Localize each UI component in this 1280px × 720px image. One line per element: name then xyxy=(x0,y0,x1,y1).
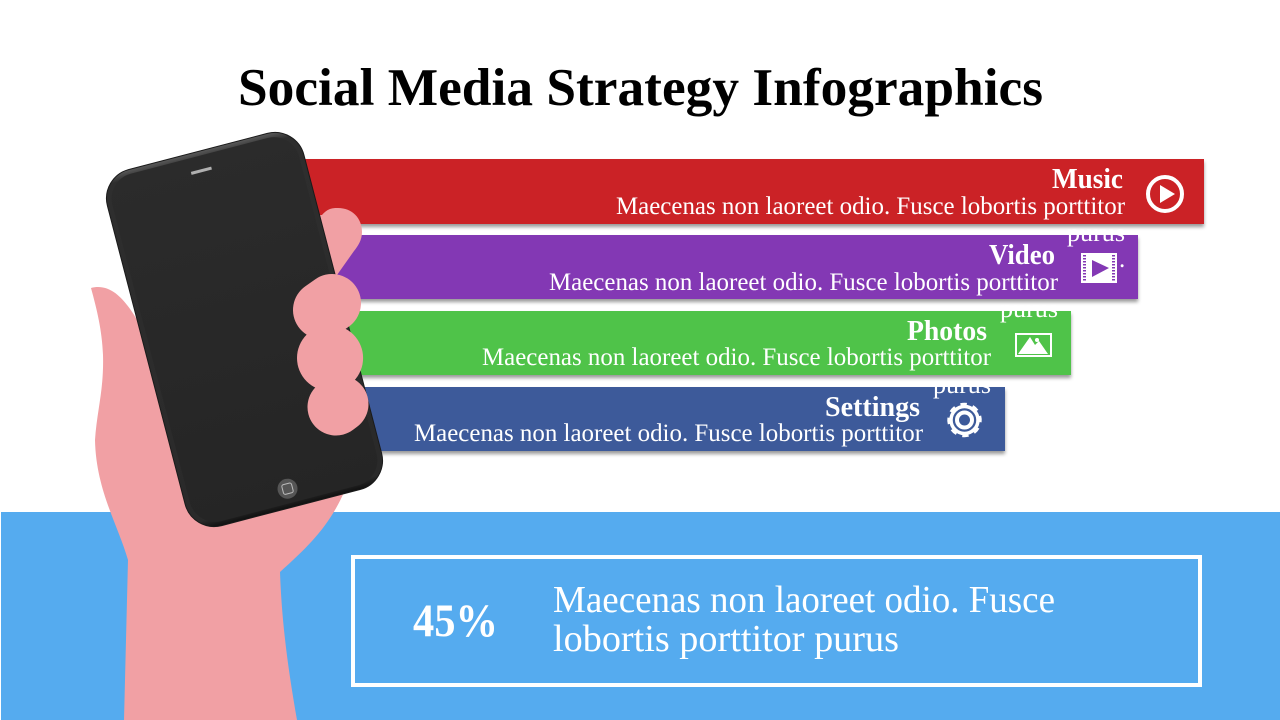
panel: video bar: Maecenas non laoreet odio. Fusce lobortis porttitor xyxy=(549,269,1059,296)
icon: gear xyxy=(946,402,983,438)
phone speaker xyxy=(191,167,212,175)
phone home button xyxy=(275,476,300,501)
panel: photos bar: Maecenas non laoreet odio. Fusce lobortis porttitor xyxy=(482,344,992,371)
panel: photos bar: purus xyxy=(1000,296,1058,323)
panel: video bar: purus xyxy=(1067,220,1125,247)
panel: settings bar: purus xyxy=(933,372,991,399)
bottom blue band xyxy=(1,512,1280,720)
callout box xyxy=(353,557,1200,685)
panel: music bar: Maecenas non laoreet odio. Fusce lobortis porttitor xyxy=(616,193,1126,220)
callout text: lobortis porttitor purus xyxy=(553,618,899,660)
panel: music bar xyxy=(300,159,1204,224)
panel: settings bar: Maecenas non laoreet odio. Fusce lobortis porttitor xyxy=(414,420,924,447)
phone xyxy=(100,126,389,533)
panel: settings bar xyxy=(350,372,1005,451)
callout text: Maecenas non laoreet odio. Fusce xyxy=(553,579,1055,621)
title: Social Media Strategy Infographics xyxy=(238,59,1043,117)
icon: image xyxy=(1016,334,1051,356)
icon: play xyxy=(1148,177,1182,211)
percentage: 45% xyxy=(413,595,498,647)
panel: photos bar xyxy=(340,296,1071,375)
panel: video bar xyxy=(330,220,1138,299)
icon: film xyxy=(1081,253,1117,283)
panel: video bar: Video xyxy=(989,240,1055,271)
panel: settings bar: Settings xyxy=(825,392,920,423)
panel: video bar: . xyxy=(1119,246,1125,273)
hand xyxy=(91,208,362,720)
callout text xyxy=(553,579,1055,660)
panel: music bar: Music xyxy=(1052,164,1123,195)
panel: photos bar: Photos xyxy=(907,316,987,347)
fingers xyxy=(322,303,340,407)
